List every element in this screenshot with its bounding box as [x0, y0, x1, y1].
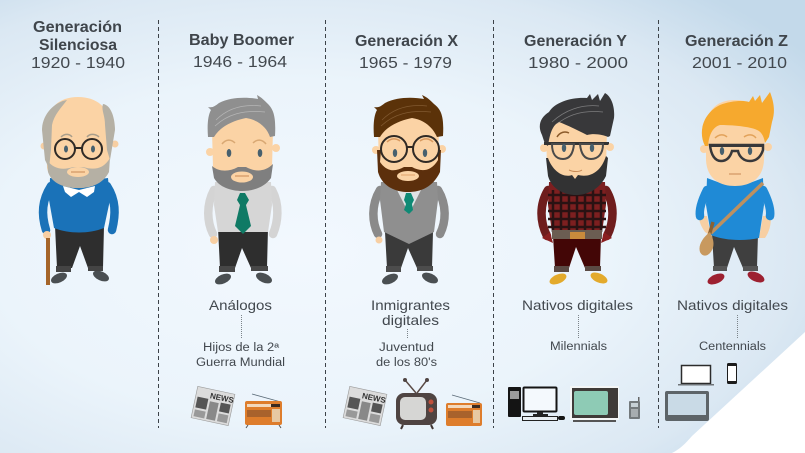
heading: Generación X	[355, 33, 459, 72]
label block: Generación X: de los 80's	[376, 357, 437, 369]
heading: Generación X: Generación X	[355, 33, 459, 50]
heading: Generación Y	[524, 33, 628, 72]
icon: laptop	[678, 366, 714, 386]
heading: Generación Y: 1980 - 2000	[528, 55, 628, 72]
icon: smartphone	[727, 363, 737, 384]
label block: Generación X: Inmigrantes	[371, 297, 450, 313]
heading: Baby Boomer	[189, 32, 294, 71]
heading: Generación Z	[685, 33, 789, 72]
icon: tablet	[665, 391, 709, 421]
label block: Baby Boomer: Guerra Mundial	[196, 357, 285, 369]
label block: Baby Boomer: Análogos	[209, 297, 272, 313]
label block: Generación Y	[522, 297, 633, 353]
heading: Generación Z: Generación Z	[685, 33, 789, 50]
heading: Generación Silenciosa: Generación	[33, 19, 122, 36]
label block: Baby Boomer: Hijos de la 2ª	[203, 342, 280, 354]
character: generation X	[372, 95, 446, 287]
icon: mobile phone	[629, 397, 640, 419]
character: baby boomer	[206, 95, 280, 287]
heading: Generación Z: 2001 - 2010	[692, 55, 787, 72]
icon: newspaper	[343, 386, 388, 426]
column dividers	[158, 20, 658, 428]
label block: Generación X: Juventud	[379, 342, 434, 354]
icon: radio	[446, 395, 482, 426]
icon: newspaper: NEWS	[209, 391, 235, 405]
heading: Generación Silenciosa: Silenciosa	[39, 37, 117, 54]
label block: Generación Z: Centennials	[699, 341, 766, 353]
label block: Generación Z: Nativos digitales	[677, 297, 788, 313]
icon: radio	[245, 394, 282, 428]
character: generation Y	[540, 93, 614, 287]
heading: Generación Y: Generación Y	[524, 33, 628, 50]
label block: Generación X: digitales	[382, 312, 439, 328]
folded white corner	[672, 332, 805, 453]
heading: Baby Boomer: Baby Boomer	[189, 32, 294, 49]
icon: television	[396, 378, 437, 429]
label block: Baby Boomer	[196, 297, 285, 369]
label block: Generación Z	[677, 297, 788, 353]
icon: newspaper	[191, 386, 236, 426]
label block: Generación Y: Nativos digitales	[522, 297, 633, 313]
heading: Baby Boomer: 1946 - 1964	[193, 54, 287, 71]
icon: CRT television	[570, 386, 619, 422]
heading: Generación X: 1965 - 1979	[359, 55, 452, 72]
icon: newspaper: NEWS	[361, 391, 387, 405]
icon: desktop computer	[508, 387, 565, 420]
character: silent generation	[40, 97, 118, 286]
label block: Generación X	[371, 297, 450, 369]
label block: Generación Y: Milennials	[550, 341, 607, 353]
heading: Generación Silenciosa	[31, 19, 125, 72]
character: generation Z	[699, 92, 774, 287]
heading: Generación Silenciosa: 1920 - 1940	[31, 55, 125, 72]
